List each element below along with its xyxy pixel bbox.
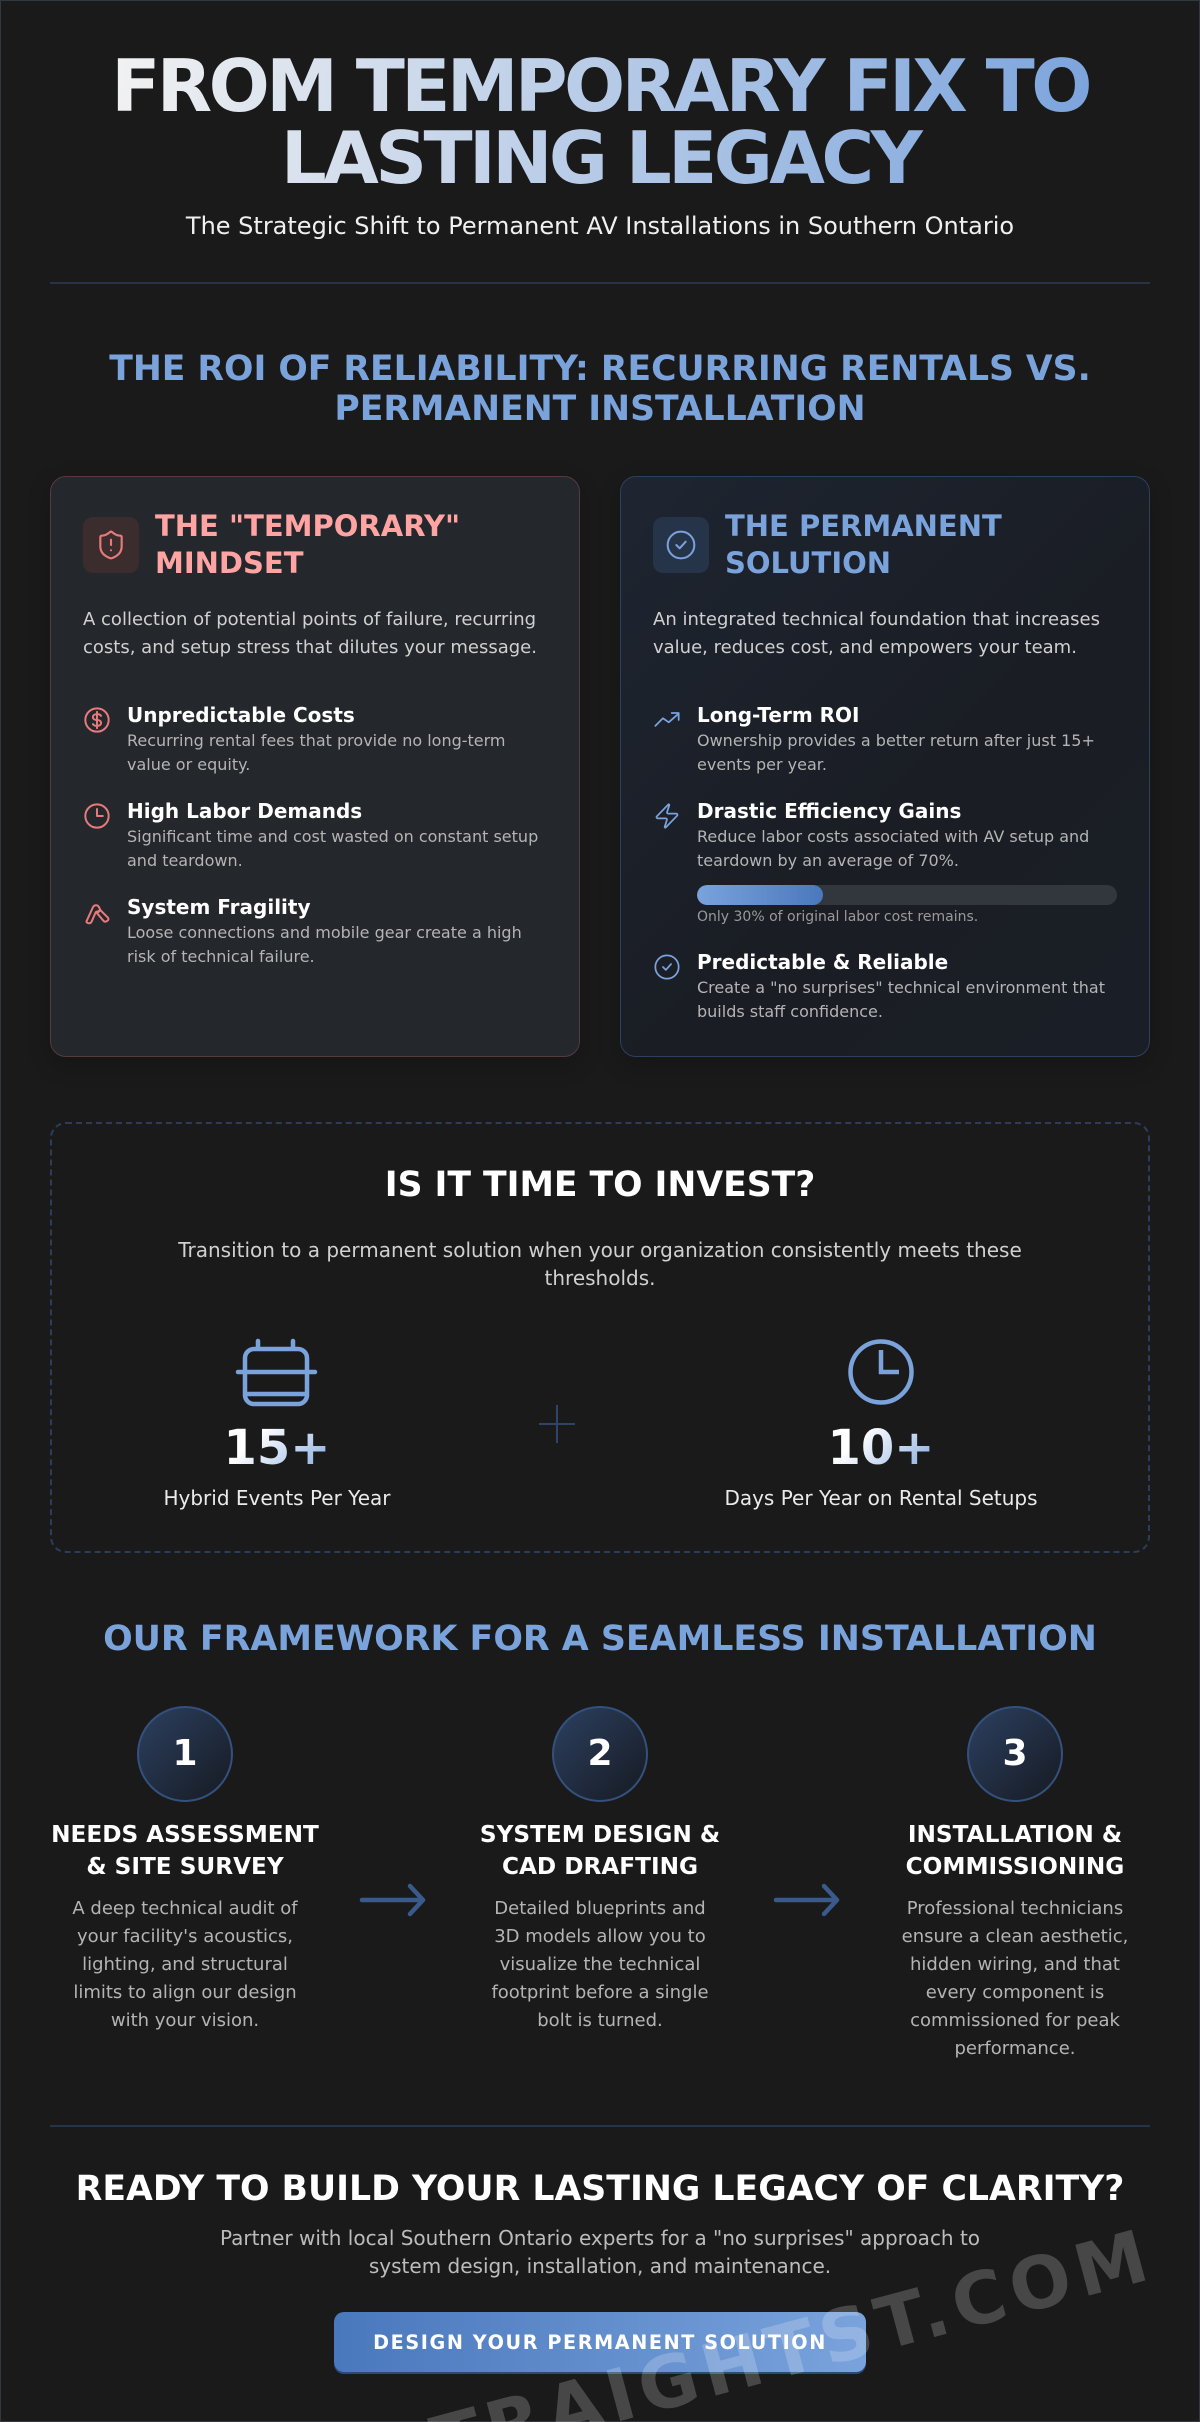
section heading: framework: OUR FRAMEWORK FOR A SEAMLESS INSTALLATION	[103, 1618, 1097, 1658]
section heading: ROI: THE ROI OF RELIABILITY: RECURRING RENTALS VS.	[109, 349, 1091, 389]
panel: is it time to invest	[50, 1122, 1150, 1553]
invest description: thresholds.	[545, 1266, 655, 1290]
panel heading: MINDSET	[155, 546, 303, 580]
step 1 text: A deep technical audit of	[72, 1898, 298, 1919]
step 3 title: INSTALLATION &	[908, 1821, 1122, 1848]
panel description: costs, and setup stress that dilutes your message.	[83, 637, 537, 658]
item: long-term ROI: Long-Term ROI	[697, 703, 859, 727]
CTA button	[334, 2312, 866, 2372]
item: system fragility	[86, 895, 522, 966]
CTA text: Partner with local Southern Ontario experts for a "no surprises" approach to	[220, 2226, 980, 2250]
stat label: events: Hybrid Events Per Year	[163, 1486, 391, 1510]
stat label: days: Days Per Year on Rental Setups	[724, 1486, 1038, 1510]
step 1 text: with your vision.	[111, 2010, 259, 2031]
item: high labor demands: High Labor Demands	[127, 799, 362, 823]
item: predictable and reliable: Create a "no surprises" technical environment that	[697, 978, 1105, 996]
item: long-term ROI: events per year.	[697, 755, 827, 774]
icon: shield alert	[83, 517, 139, 573]
step 2 text	[491, 1898, 709, 2031]
icon: clock	[848, 1339, 914, 1405]
step 3 text: ensure a clean aesthetic,	[902, 1926, 1128, 1947]
title	[111, 44, 1089, 200]
panel description: value, reduces cost, and empowers your team.	[653, 637, 1077, 658]
item: unpredictable costs: Recurring rental fees that provide no long-term	[127, 730, 506, 750]
plus sign	[539, 1405, 575, 1443]
step 1 title	[51, 1821, 319, 1880]
step 1 number	[137, 1706, 233, 1802]
section heading: ROI: PERMANENT INSTALLATION	[334, 389, 866, 429]
item: long-term ROI: Ownership provides a better return after just 15+	[697, 730, 1095, 750]
item: efficiency gains: teardown by an average of 70%.	[697, 851, 959, 870]
CTA text	[220, 2226, 980, 2278]
item: unpredictable costs: value or equity.	[127, 755, 250, 774]
item: high labor demands: Significant time and cost wasted on constant setup	[127, 826, 538, 846]
step 3 number	[967, 1706, 1063, 1802]
step 2 number	[552, 1706, 648, 1802]
item: predictable and reliable	[654, 950, 1105, 1021]
step 3 text: Professional technicians	[907, 1898, 1123, 1919]
step 1 title: NEEDS ASSESSMENT	[51, 1821, 319, 1848]
panel heading	[155, 509, 460, 580]
CTA heading: READY TO BUILD YOUR LASTING LEGACY OF CLARITY?	[76, 2168, 1124, 2208]
item: unpredictable costs	[84, 703, 506, 774]
subtitle: The Strategic Shift to Permanent AV Installations in Southern Ontario	[186, 212, 1014, 240]
arrow 2	[774, 1884, 840, 1916]
step 3 title: COMMISSIONING	[906, 1853, 1124, 1880]
step 3 title	[906, 1821, 1124, 1880]
step 1 text: limits to align our design	[73, 1982, 297, 2003]
item: system fragility: Loose connections and mobile gear create a high	[127, 922, 522, 942]
panel: permanent solution	[620, 476, 1150, 1057]
item: predictable and reliable: Predictable & Reliable	[697, 950, 948, 974]
stat: events: 15+	[223, 1420, 330, 1476]
item: long-term ROI	[654, 703, 1095, 774]
step 1 number: 1	[172, 1733, 198, 1774]
step 2 text: Detailed blueprints and	[494, 1898, 706, 1919]
panel description	[83, 608, 537, 658]
item: efficiency gains	[656, 799, 1089, 870]
panel: temporary mindset	[50, 476, 580, 1057]
item: predictable and reliable: builds staff confidence.	[697, 1002, 883, 1021]
icon: calendar	[236, 1338, 318, 1406]
icon: check circle	[653, 517, 709, 573]
title: FROM TEMPORARY FIX TO	[111, 44, 1089, 128]
progress bar: 30% labor cost	[697, 885, 1117, 905]
CTA button: DESIGN YOUR PERMANENT SOLUTION	[373, 2331, 827, 2354]
title: LASTING LEGACY	[281, 116, 919, 200]
step 2 title: CAD DRAFTING	[502, 1853, 698, 1880]
step 2 text: footprint before a single	[491, 1982, 709, 2003]
panel heading: THE PERMANENT	[725, 509, 1002, 543]
arrow 1	[360, 1884, 426, 1916]
stat: days: 10+	[827, 1420, 934, 1476]
step 2 title: SYSTEM DESIGN &	[480, 1821, 720, 1848]
step 3 text: hidden wiring, and that	[910, 1954, 1120, 1975]
progress caption: Only 30% of original labor cost remains.	[697, 909, 978, 925]
step 3 text: performance.	[954, 2038, 1076, 2059]
step 1 text: lighting, and structural	[82, 1954, 288, 1975]
item: high labor demands	[84, 799, 538, 870]
panel description	[653, 608, 1100, 658]
step 2 text: visualize the technical	[500, 1954, 700, 1975]
invest description	[178, 1238, 1022, 1290]
step 2 text: 3D models allow you to	[494, 1926, 706, 1947]
item: system fragility: risk of technical failure.	[127, 947, 315, 966]
panel heading: THE "TEMPORARY"	[155, 509, 460, 543]
item: high labor demands: and teardown.	[127, 851, 243, 870]
panel heading	[725, 509, 1002, 580]
panel heading: SOLUTION	[725, 546, 891, 580]
item: unpredictable costs: Unpredictable Costs	[127, 703, 355, 727]
CTA text: system design, installation, and maintenance.	[369, 2254, 831, 2278]
step 2 text: bolt is turned.	[537, 2010, 663, 2031]
step 1 text	[72, 1898, 298, 2031]
panel description: An integrated technical foundation that increases	[653, 608, 1100, 630]
item: efficiency gains: Reduce labor costs associated with AV setup and	[697, 826, 1089, 846]
step 1 text: your facility's acoustics,	[77, 1926, 293, 1947]
item: efficiency gains: Drastic Efficiency Gains	[697, 799, 961, 823]
step 3 text	[902, 1898, 1128, 2059]
step 2 number: 2	[587, 1733, 613, 1774]
section heading: ROI	[109, 349, 1091, 429]
step 3 number: 3	[1002, 1733, 1028, 1774]
invest description: Transition to a permanent solution when your organization consistently meets these	[178, 1238, 1022, 1262]
step 1 title: & SITE SURVEY	[86, 1853, 284, 1880]
item: system fragility: System Fragility	[127, 895, 310, 919]
step 3 text: every component is	[926, 1982, 1104, 2003]
step 2 title	[480, 1821, 720, 1880]
heading: invest: IS IT TIME TO INVEST?	[385, 1164, 815, 1204]
panel description: A collection of potential points of failure, recurring	[83, 608, 536, 630]
step 3 text: commissioned for peak	[910, 2010, 1120, 2031]
